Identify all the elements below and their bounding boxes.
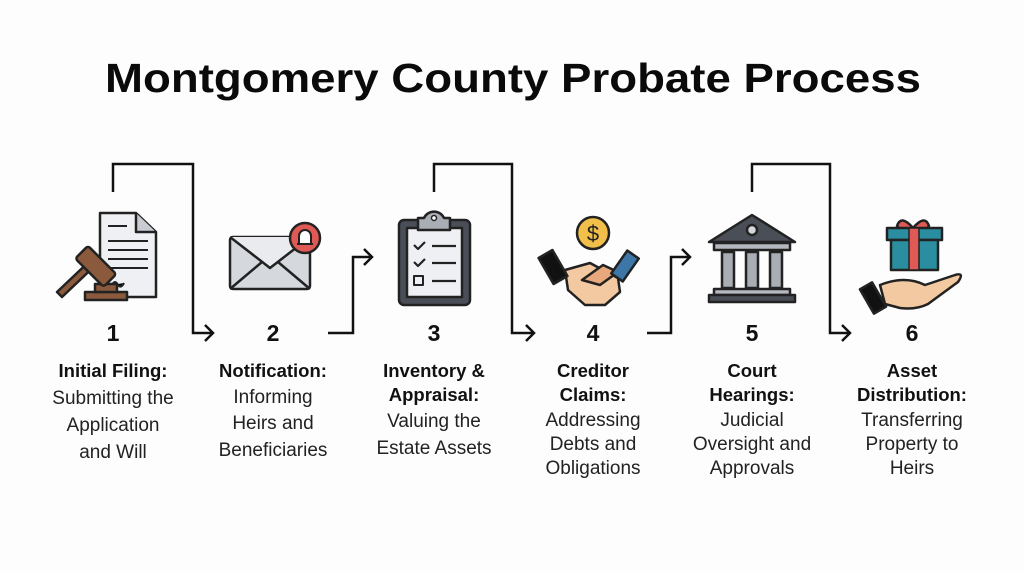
step 1 text: Submitting the [52,388,174,409]
step 2 text: Informing [233,387,313,408]
step 5 text: Hearings: [709,384,795,405]
step 6 text: Heirs [890,458,934,479]
step 1 text [52,320,174,463]
icon: gift on hand [860,220,961,314]
step 4 text: Debts and [550,434,636,455]
step 4 text: Obligations [545,458,641,479]
icon: courthouse [709,215,795,302]
icon: handshake with coin [539,217,639,305]
arrow: 4 to 5 [647,249,690,333]
step 4 text [545,320,641,479]
step 4 text: Claims: [560,384,626,405]
step 4 text: 4 [587,320,600,346]
step 5 text: Court [727,360,777,381]
step 3 text [376,320,492,459]
step 2 text: Beneficiaries [219,440,327,461]
arrow: 3 to 4 [434,164,534,341]
step 5 text [693,320,811,479]
step 2 text [219,320,327,461]
step 2 text: Heirs and [232,413,314,434]
step 6 text [857,320,967,479]
icon: gavel and document [57,213,156,300]
step 3 text: Appraisal: [389,384,479,405]
step 3 text: Valuing the [387,411,481,432]
arrow: 5 to 6 [752,164,850,341]
step 5 text: Oversight and [693,434,811,455]
arrow: 2 to 3 [328,249,372,333]
step 6 text: 6 [906,320,918,346]
step 1 text: Application [67,415,159,436]
step 3 text: Estate Assets [376,438,492,459]
step 6 text: Transferring [861,410,963,431]
step 1 text: and Will [79,442,147,463]
step 6 text: Asset [887,360,937,381]
step 2 text: 2 [267,320,279,346]
step 4 text: Addressing [545,410,641,431]
step 6 text: Distribution: [857,384,967,405]
arrow: 1 to 2 [113,164,213,341]
step 1 text: Initial Filing: [59,360,167,381]
step 5 text: 5 [746,320,759,346]
step 1 text: 1 [107,320,120,346]
step 2 text: Notification: [219,360,327,381]
icon: clipboard checklist [399,212,470,305]
title: Montgomery County Probate Process [105,55,921,101]
step 6 text: Property to [866,434,958,455]
icon: envelope with bell [230,223,320,289]
step 5 text: Approvals [710,458,794,479]
icon: handshake with coin: $ [587,221,599,246]
step 4 text: Creditor [557,360,629,381]
step 3 text: 3 [428,320,440,346]
step 5 text: Judicial [720,410,784,431]
step 3 text: Inventory & [383,360,485,381]
